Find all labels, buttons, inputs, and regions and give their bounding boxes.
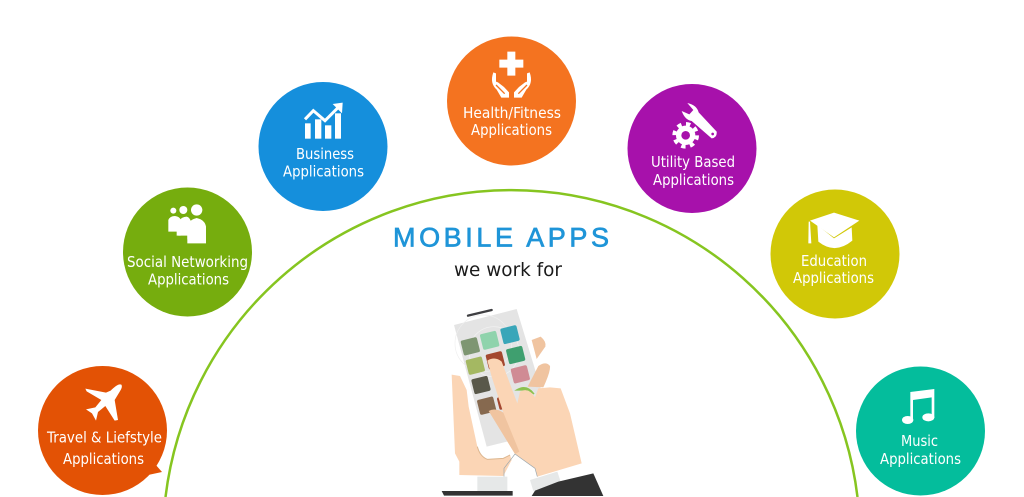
green arc [166,190,858,497]
label: Applications [148,270,229,288]
label: Utility Based [651,153,735,171]
item: Utility Based [628,84,756,213]
label: Music [901,432,938,450]
jacket sleeves [442,473,603,496]
item: Music [856,366,985,496]
item: Business [258,82,388,211]
illustration: hand holding phone [442,309,603,496]
label: Applications [63,450,144,468]
label [283,145,364,180]
icon: people [168,204,206,243]
title: MOBILE APPS [393,222,609,252]
badge [628,84,756,213]
wrist outline [504,454,537,477]
label: Health/Fitness [463,104,561,122]
label: Social Networking [127,253,248,271]
back fingers [517,337,550,394]
label [127,253,248,288]
badge with speech tail [148,464,162,475]
icon: growth chart [305,103,343,139]
icon: graduation cap [808,213,859,248]
subtitle: we work for [454,259,562,281]
label: Applications [653,171,734,189]
item: Education [770,190,900,318]
badge [856,366,985,496]
item: Travel & Lifestyle [38,366,167,495]
label: Business [296,145,354,163]
label [463,104,561,139]
label [880,432,961,468]
badge [770,190,900,318]
label: Applications [880,450,961,468]
shirt cuffs [477,472,561,491]
left hand [452,375,512,476]
icon: music note [902,389,934,424]
item: Health/Fitness [447,36,576,166]
label: Education [801,252,867,270]
label: Applications [471,121,552,139]
icon: wrench and gear [674,103,717,147]
label [793,252,874,287]
label: Travel & Liefstyle [46,428,162,446]
label: Applications [793,269,874,287]
badge [447,36,576,166]
icon: cross in hands [492,52,531,98]
badge [123,188,252,316]
badge [258,82,388,211]
right hand [487,359,582,477]
label [651,153,735,189]
item: Social Networking [123,188,252,316]
icon: airplane [85,384,122,421]
phone [454,309,543,460]
label [46,428,162,468]
label: Applications [283,162,364,180]
